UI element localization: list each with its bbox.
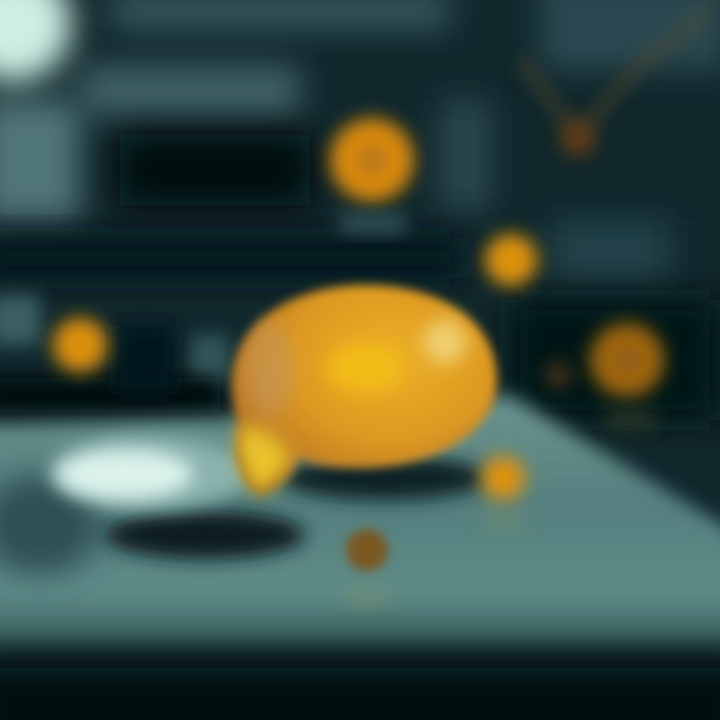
glow: top-left light (0, 0, 72, 82)
bubble left tint (246, 322, 294, 418)
table front shadow (0, 668, 720, 720)
bubble shadow (280, 456, 490, 500)
icon: right circle (590, 323, 664, 397)
icon: bottom circle (346, 529, 388, 571)
bubble tail highlight (238, 425, 290, 493)
icon: left circle (53, 318, 107, 372)
bubble body (232, 285, 497, 495)
icon: faint orange node (560, 120, 596, 156)
faint orange chart line: top right (520, 10, 710, 135)
label under right circle (605, 410, 655, 430)
background bands (0, 0, 720, 420)
label under bottom circle (347, 588, 387, 606)
shadow under dish (105, 511, 305, 559)
icon: top circle (330, 118, 414, 202)
dish (50, 437, 250, 509)
faint orange node: right of bubble (545, 362, 571, 388)
label under lower right circle (486, 514, 522, 530)
speech bubble (232, 285, 497, 495)
table surface (0, 395, 720, 645)
bubble centre icon (327, 344, 403, 392)
icon: right upper circle (485, 234, 537, 286)
icon: lower right circle (481, 456, 525, 500)
label under top circle (340, 214, 406, 232)
dark texture: lower-left (0, 475, 100, 575)
bubble highlight (423, 320, 467, 364)
